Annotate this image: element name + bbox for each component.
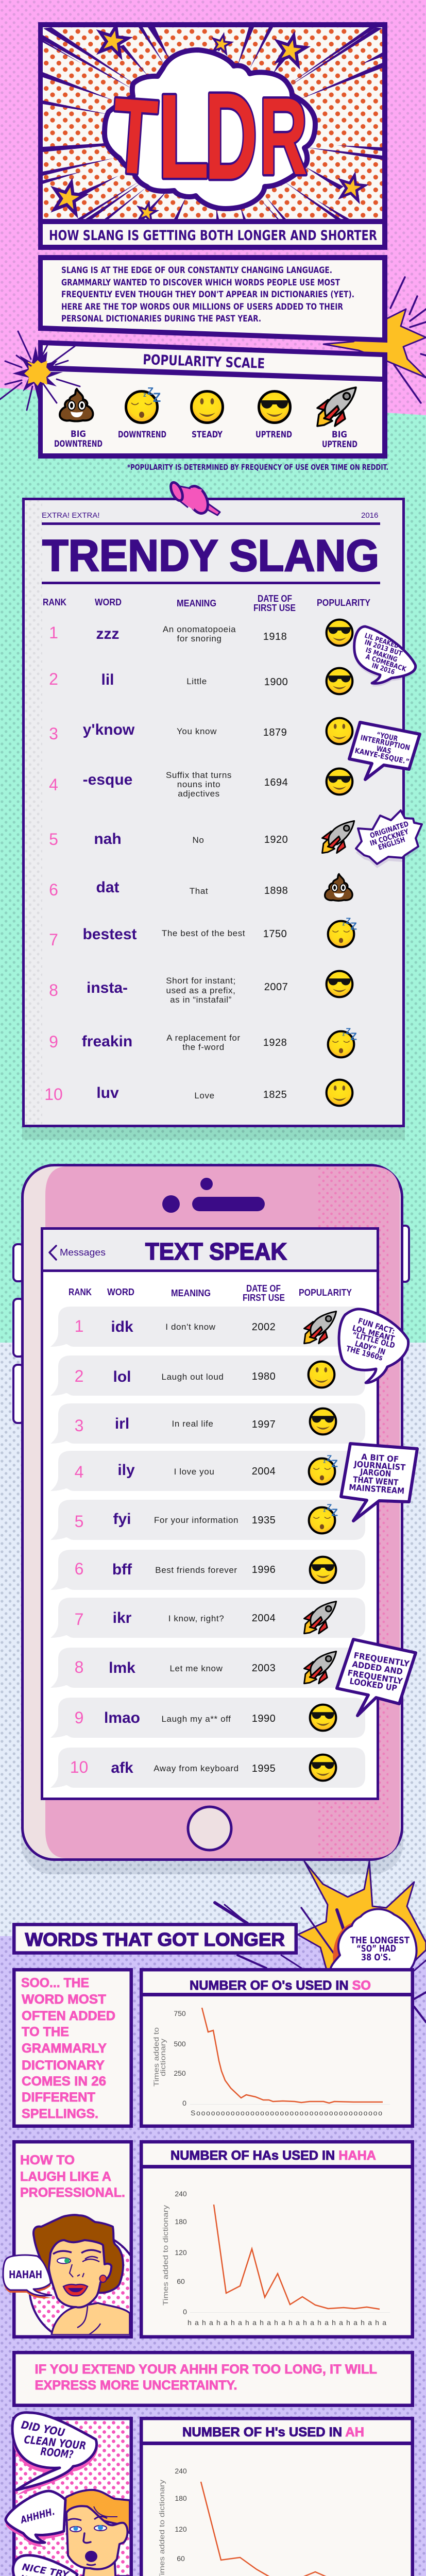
row 7: ikr	[50, 1598, 365, 1638]
row 3: irl: In real life	[172, 1419, 213, 1429]
callout: journalist jargon	[341, 1444, 417, 1521]
callout: kanye-esque quote: KANYE-ESQUE.”	[354, 747, 410, 766]
row 1: zzz: zzz	[96, 625, 120, 642]
row 2: lil	[49, 668, 352, 694]
scale item: big downtrend: DOWNTREND	[54, 439, 103, 449]
background: pink top section	[0, 0, 426, 415]
line chart	[190, 2482, 390, 2576]
callout: lol fun fact	[339, 1309, 408, 1383]
yellow burst: left of popularity panel	[0, 331, 80, 410]
row 7: bestest: 7	[49, 930, 58, 949]
row 9: freakin: 1928	[263, 1037, 287, 1048]
row 9: freakin: 9	[49, 1032, 58, 1051]
row 5: nah	[49, 821, 354, 853]
panel shadow: newspaper	[22, 1127, 405, 1140]
line chart	[190, 2008, 390, 2105]
row 6: dat: 1898	[264, 885, 288, 896]
intro copy: GRAMMARLY WANTED TO DISCOVER WHICH WORDS PEOPLE USE MOST	[61, 278, 340, 288]
panel: extend your ahhh: IF YOU EXTEND YOUR AHHH FOR TOO LONG, IT WILL	[35, 2362, 377, 2377]
phone side buttons	[13, 1226, 409, 1423]
callout: journalist jargon: THAT WENT	[353, 1475, 399, 1487]
cloud callout: longest so: “SO” HAD	[356, 1943, 396, 1954]
panel: trendy slang newspaper	[24, 499, 404, 1126]
row 7: ikr: ikr	[113, 1609, 132, 1626]
row 10: afk	[50, 1748, 365, 1788]
row 4: ily: ily	[117, 1462, 135, 1479]
row 6: bff: bff	[112, 1561, 132, 1578]
y axis labels: 500	[174, 2040, 186, 2048]
table header: DATE OF	[246, 1283, 281, 1294]
row 3: y'know: 3	[49, 724, 58, 743]
scale item: uptrend	[255, 392, 292, 440]
callout: kanye-esque quote: WAS	[376, 744, 392, 756]
row 4: -esque: 4	[49, 775, 58, 794]
row 1: zzz: 1918	[263, 631, 287, 642]
callout: frequently added: ADDED AND	[351, 1659, 403, 1676]
callout: lol fun fact: FUN FACT:	[357, 1316, 396, 1336]
intro copy	[61, 265, 354, 324]
y axis labels: 750	[174, 2009, 186, 2018]
panel: soo text: SOO... THE	[21, 1976, 89, 1990]
callout: lol fun fact: THE 1960s	[345, 1344, 384, 1363]
woman illustration	[29, 2214, 130, 2335]
row 2: lol: Laugh out loud	[162, 1372, 224, 1382]
row 4: ily: 2004	[252, 1466, 276, 1477]
row 6: bff: 1996	[252, 1564, 276, 1575]
hero panel: TLDR comic explosion	[38, 22, 387, 250]
y axis labels: 180	[175, 2494, 187, 2502]
row 7: ikr: I know, right?	[168, 1614, 224, 1623]
table header: FIRST USE	[243, 1293, 285, 1303]
chart title: NUMBER OF O's USED IN SO	[190, 1978, 371, 1993]
heading panel: words that got longer: WORDS THAT GOT LONGER	[25, 1929, 285, 1950]
table header	[43, 594, 370, 613]
heading: text speak: TEXT SPEAK	[145, 1238, 287, 1265]
scale item: uptrend: UPTREND	[255, 430, 292, 440]
scale item: big downtrend: BIG	[71, 429, 86, 439]
cloud callout: longest so: 38 O'S.	[361, 1952, 391, 1963]
scale item: downtrend: DOWNTREND	[118, 430, 166, 440]
row 2: lil: Little	[186, 676, 207, 686]
row 8: insta-	[49, 971, 352, 1005]
row 8: lmk: 8	[75, 1658, 83, 1676]
row 3: y'know	[49, 718, 352, 744]
row 8: lmk: Let me know	[170, 1664, 223, 1673]
masthead: 2016	[361, 511, 378, 520]
row 4: ily: I love you	[174, 1467, 214, 1477]
row 4: -esque: Suffix that turns	[166, 770, 232, 780]
burst action lines	[215, 1903, 426, 2022]
table header: FIRST USE	[253, 603, 296, 613]
y axis labels: 240	[175, 2190, 187, 2198]
callout: originated in cockney english: ENGLISH	[377, 836, 406, 852]
title: TLDR: T	[108, 75, 161, 197]
row 8: lmk	[50, 1648, 365, 1688]
row 5: fyi	[50, 1500, 365, 1540]
panel: popularity scale	[38, 340, 387, 459]
row 4: -esque	[49, 769, 352, 799]
row 2: lol: 2	[75, 1367, 83, 1385]
line chart	[190, 2205, 390, 2313]
scale item: big uptrend: BIG	[332, 430, 347, 440]
row 9: freakin: A replacement for	[166, 1033, 241, 1043]
panel: how to laugh with woman illustration: PROFESSIONAL.	[20, 2185, 125, 2200]
callout: kanye-esque quote: INTERRUPTION	[360, 734, 411, 752]
panel: soo text: SPELLINGS.	[22, 2107, 98, 2121]
row 1: zzz: 1	[49, 623, 58, 642]
row 6: bff: 6	[75, 1560, 83, 1578]
row 5: fyi: For your information	[154, 1515, 238, 1525]
row 7: bestest	[49, 916, 357, 949]
boy illustration	[61, 2490, 130, 2576]
panel: extend your ahhh	[14, 2352, 413, 2405]
explosion cloud	[105, 50, 315, 209]
panel: extend your ahhh: EXPRESS MORE UNCERTAINTY.	[35, 2378, 237, 2393]
y axis labels: 120	[175, 2248, 187, 2257]
heading panel: words that got longer	[14, 1925, 296, 1953]
table header	[69, 1283, 352, 1303]
phone camera and speaker	[162, 1178, 265, 1213]
row 10: afk: 1995	[252, 1763, 276, 1774]
row 4: ily	[50, 1451, 365, 1491]
footnote: *POPULARITY IS DETERMINED BY FREQUENCY OF USE OVER TIME ON REDDIT.	[127, 463, 388, 472]
y axis labels: 0	[183, 2308, 187, 2316]
callout: originated in cockney english	[356, 810, 422, 868]
scale item: steady: STEADY	[192, 430, 223, 440]
row 9: freakin: the f-word	[182, 1042, 225, 1052]
callout: journalist jargon: JOURNALIST	[353, 1459, 406, 1472]
row 10: luv: Love	[194, 1091, 215, 1100]
row 4: ily: 4	[75, 1463, 83, 1481]
chart panel: number of o's in so	[140, 1970, 414, 2126]
callout: lil peaked: A COMEBACK	[365, 653, 407, 673]
cloud callout: longest so	[330, 1909, 417, 1973]
y axis labels: 180	[175, 2217, 187, 2226]
intro copy: HERE ARE THE TOP WORDS OUR MILLIONS OF USERS ADDED TO THEIR	[61, 302, 343, 312]
callout: frequently added: FREQUENTLY	[347, 1668, 404, 1686]
row 2: lil: lil	[101, 671, 114, 688]
row 1: zzz: for snoring	[177, 634, 221, 643]
table header: DATE OF	[258, 594, 292, 604]
callout: lil peaked	[354, 626, 416, 686]
row 10: luv: luv	[96, 1084, 119, 1101]
scale item: big downtrend	[54, 389, 103, 449]
y axis labels: 60	[177, 2554, 185, 2563]
y axis labels	[152, 2009, 186, 2107]
y axis labels: 250	[174, 2069, 186, 2077]
panel: soo text: WORD MOST	[22, 1992, 106, 2007]
row 2: lol: lol	[113, 1368, 131, 1385]
row 5: fyi: 5	[75, 1512, 83, 1531]
intro copy: FREQUENTLY EVEN THOUGH THEY DON'T APPEAR IN DICTIONARIES (YET).	[61, 290, 354, 300]
row 8: insta-: used as a prefix,	[166, 986, 235, 995]
y axis labels: 0	[182, 2099, 186, 2107]
intro copy: PERSONAL DICTIONARIES DURING THE PAST YEAR.	[61, 314, 261, 324]
row 8: insta-: 2007	[264, 981, 288, 993]
callout: lil peaked: LIL PEAKED	[364, 632, 400, 650]
callout: lil peaked: IN 2016	[371, 662, 396, 676]
cloud callout: longest so: THE LONGEST	[350, 1935, 410, 1946]
bubble: ahhhh: AHHHH.	[19, 2506, 56, 2526]
row 7: ikr: 7	[75, 1610, 83, 1629]
popularity scale heading: POPULARITY SCALE	[143, 352, 265, 372]
row 9: freakin	[49, 1026, 357, 1057]
callout: kanye-esque quote: “YOUR	[376, 731, 399, 743]
row 9: freakin: freakin	[82, 1033, 132, 1050]
panel: how to laugh with woman illustration: HOW TO	[20, 2153, 75, 2167]
table header: RANK	[43, 597, 66, 607]
panel: soo text: COMES IN 26	[22, 2074, 106, 2089]
y axis labels: 240	[175, 2467, 187, 2475]
panel: intro text	[38, 255, 387, 343]
bubble: did you clean your room: DID YOU	[20, 2418, 66, 2439]
row 3: y'know: 1879	[263, 727, 287, 738]
row 2: lil: 1900	[264, 676, 288, 688]
panel: soo text: OFTEN ADDED	[22, 2009, 115, 2023]
scale item: big uptrend: UPTREND	[322, 439, 357, 450]
row 4: -esque: 1694	[264, 777, 288, 788]
row 10: luv: 1825	[263, 1089, 287, 1100]
callout: journalist jargon: JARGON	[360, 1467, 391, 1479]
bubble: did you clean your room: CLEAN YOUR	[23, 2433, 87, 2452]
panel: soo text: TO THE	[22, 2025, 69, 2039]
row 3: y'know: You know	[177, 726, 217, 736]
callout: lol fun fact: LADY” IN	[354, 1339, 386, 1357]
row 3: y'know: y'know	[83, 721, 135, 738]
row 1: idk: 1	[75, 1317, 83, 1335]
row 2: lil: 2	[49, 670, 58, 688]
chart title: NUMBER OF H's USED IN AH	[182, 2425, 364, 2439]
chart panel: number of h's in ah	[140, 2418, 414, 2576]
callout: kanye-esque quote	[349, 722, 420, 779]
y axis labels: 60	[177, 2277, 185, 2285]
panel: comic of henry	[6, 2413, 131, 2576]
table header: WORD	[107, 1287, 134, 1297]
table header: POPULARITY	[299, 1287, 352, 1298]
panel: how to laugh with woman illustration: LAUGH LIKE A	[20, 2170, 111, 2184]
chart panel: number of has in haha	[140, 2142, 414, 2337]
row 3: irl: 1997	[252, 1419, 276, 1430]
heading: trendy slang: TRENDY SLANG	[42, 531, 379, 581]
scale item: downtrend	[118, 386, 166, 440]
row 7: bestest: 1750	[263, 928, 287, 940]
panel: soo text: DIFFERENT	[22, 2090, 95, 2105]
row 5: fyi: 1935	[252, 1515, 276, 1526]
row 6: bff	[50, 1550, 365, 1590]
yellow burst behind phone and longer panels	[215, 1861, 426, 2022]
row 9: lmao: lmao	[104, 1709, 140, 1726]
row 8: insta-: as in “instafail”	[170, 995, 232, 1005]
callout: frequently added: FREQUENTLY	[353, 1650, 411, 1669]
phone screen	[42, 1228, 379, 1799]
row 4: -esque: nouns into	[177, 779, 220, 789]
panel: soo text: GRAMMARLY	[22, 2041, 107, 2056]
callout: frequently added: LOOKED UP	[349, 1676, 398, 1693]
table header: MEANING	[177, 598, 216, 608]
background: lavender section	[0, 1936, 426, 2576]
row 10: luv: 10	[44, 1085, 63, 1104]
row 9: lmao: 9	[75, 1708, 83, 1727]
row 8: insta-: insta-	[87, 979, 128, 996]
table header: RANK	[69, 1287, 92, 1297]
row 2: lol	[50, 1355, 365, 1396]
table header: WORD	[95, 597, 122, 607]
row 7: ikr: 2004	[252, 1613, 276, 1624]
row 1: idk	[50, 1307, 365, 1347]
radiating action lines	[43, 27, 382, 219]
callout: originated in cockney english: IN COCKNEY	[369, 827, 410, 848]
row 10: luv	[44, 1080, 352, 1106]
speech bubble: hahah	[3, 2255, 52, 2298]
icon: push pin	[168, 481, 220, 517]
title: TLDR: L	[158, 70, 209, 204]
row 1: idk: idk	[111, 1318, 133, 1335]
callout: journalist jargon: A BIT OF	[361, 1452, 399, 1464]
bubble: did you clean your room	[12, 2413, 98, 2495]
row 6: bff: Best friends forever	[155, 1565, 237, 1575]
row 4: -esque: adjectives	[178, 789, 220, 799]
row 6: dat: That	[190, 886, 208, 896]
intro copy: SLANG IS AT THE EDGE OF OUR CONSTANTLY CHANGING LANGUAGE.	[61, 265, 332, 276]
row 6: dat: dat	[96, 879, 120, 896]
y axis labels: dictionary	[159, 2039, 167, 2076]
y axis labels: Times added to	[152, 2027, 160, 2087]
background: teal section	[0, 388, 426, 1343]
scale item: steady	[192, 392, 223, 440]
row 5: nah: nah	[94, 831, 122, 848]
bubble: ahhhh	[6, 2491, 65, 2547]
row 5: nah: 5	[49, 830, 58, 849]
phone home button	[188, 1807, 231, 1850]
bubble: nice try henry	[13, 2555, 77, 2576]
title: TLDR	[108, 67, 308, 205]
row 5: nah: 1920	[264, 834, 288, 845]
row 8: lmk: lmk	[109, 1659, 135, 1676]
y axis labels	[158, 2467, 187, 2576]
row 2: lol: 1980	[252, 1371, 276, 1382]
messages back link: Messages	[60, 1247, 106, 1258]
masthead	[42, 511, 380, 584]
row 1: zzz	[49, 620, 352, 646]
speech bubble: hahah: HAHAH	[9, 2268, 42, 2281]
callout: lil peaked: IS MAKING	[365, 647, 398, 664]
phone: text speak	[23, 1165, 402, 1860]
panel: soo text	[14, 1970, 131, 2126]
row 6: dat: 6	[49, 880, 58, 899]
row 3: irl: irl	[115, 1415, 129, 1432]
y axis labels: Times added to dictionary	[161, 2205, 169, 2306]
masthead: EXTRA! EXTRA!	[42, 511, 100, 520]
subtitle: HOW SLANG IS GETTING BOTH LONGER AND SHORTER	[49, 228, 377, 244]
callout: originated in cockney english: ORIGINATED	[369, 820, 410, 840]
x axis label: h a h a h a h a h a h a h a h a h a h a h a h a h a h a	[188, 2318, 386, 2327]
callout: frequently added	[337, 1639, 416, 1716]
y axis labels	[161, 2190, 187, 2316]
row 9: lmao	[50, 1698, 365, 1738]
table header: POPULARITY	[317, 598, 370, 608]
row 7: bestest: bestest	[82, 926, 137, 943]
bubble: did you clean your room: ROOM?	[40, 2445, 74, 2461]
row 5: nah: No	[193, 835, 204, 845]
row 9: lmao: 1990	[252, 1713, 276, 1724]
row 10: afk: Away from keyboard	[154, 1764, 239, 1773]
chart title: NUMBER OF HAs USED IN HAHA	[171, 2148, 376, 2163]
callout: lol fun fact: LOL MEANT	[351, 1323, 396, 1344]
row 4: -esque: -esque	[83, 771, 132, 788]
row 1: idk: 2002	[252, 1321, 276, 1333]
row 8: lmk: 2003	[252, 1663, 276, 1674]
row 10: afk: 10	[70, 1758, 88, 1776]
row 1: zzz: An onomatopoeia	[163, 624, 236, 634]
scale item: big uptrend	[317, 387, 357, 450]
y axis labels: 120	[175, 2525, 187, 2533]
x axis label: Soooooooooooooooooooooooooooooooooooooo	[191, 2109, 382, 2117]
panel: soo text: DICTIONARY	[22, 2058, 105, 2073]
row 6: dat	[49, 874, 352, 901]
stars	[50, 23, 367, 223]
background: pale blue section	[0, 1343, 426, 1936]
row 8: insta-: 8	[49, 981, 58, 999]
row 7: bestest: The best of the best	[162, 928, 245, 938]
title: TLDR: D	[205, 67, 258, 205]
callout: journalist jargon: MAINSTREAM	[349, 1482, 405, 1496]
row 1: idk: I don't know	[165, 1322, 216, 1332]
table header: MEANING	[171, 1288, 211, 1298]
callout: lol fun fact: “LITTLE OLD	[351, 1330, 396, 1350]
phone shadow	[21, 1236, 403, 1874]
messages back link	[49, 1246, 106, 1260]
row 3: irl	[50, 1403, 365, 1444]
row 5: fyi: fyi	[113, 1511, 131, 1528]
panel: how to laugh with woman illustration	[3, 2142, 141, 2343]
title: TLDR: R	[259, 75, 308, 198]
callout: lil peaked: IN 2013 BUT	[364, 639, 403, 658]
row 9: lmao: Laugh my a** off	[162, 1714, 231, 1724]
row 8: insta-: Short for instant;	[166, 976, 236, 986]
yellow burst: right of popularity panel	[323, 277, 426, 403]
row 10: afk: afk	[111, 1759, 133, 1776]
row 3: irl: 3	[75, 1416, 83, 1435]
